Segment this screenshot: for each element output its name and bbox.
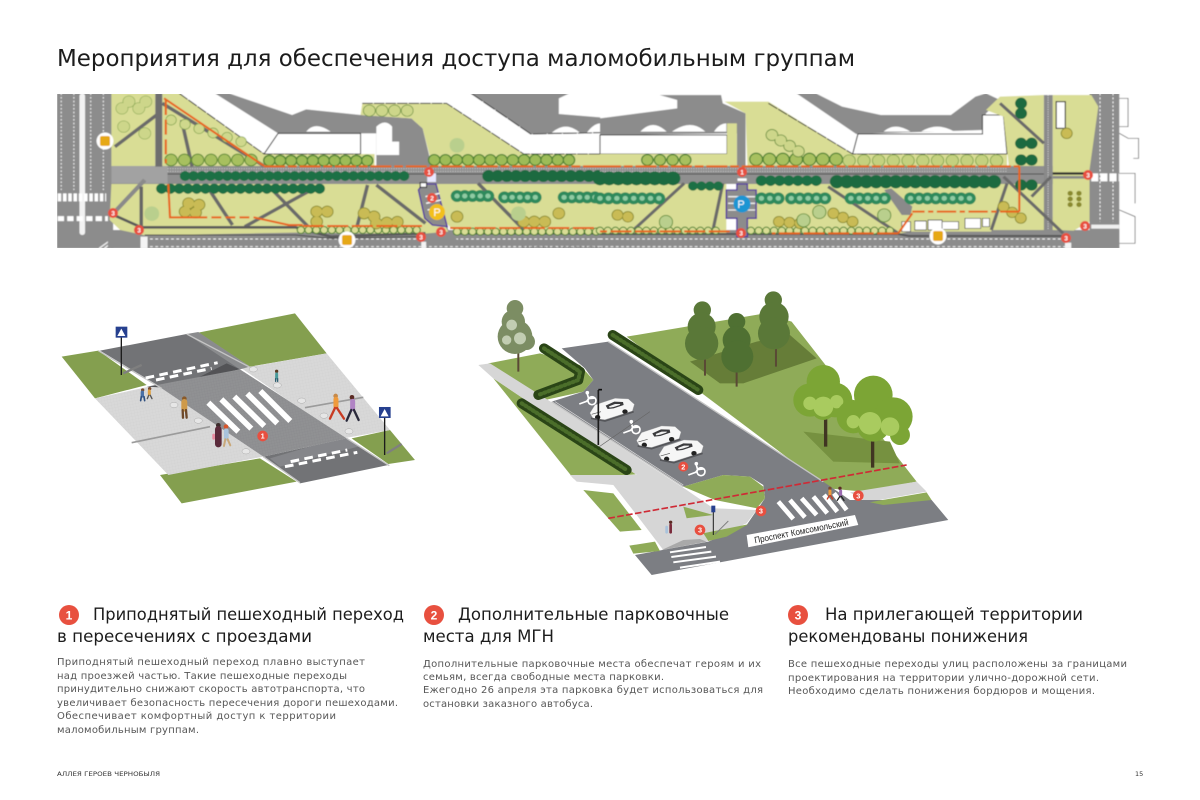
map east half (600, 93, 1139, 248)
road signs (116, 327, 402, 455)
lawns (627, 313, 917, 492)
pedestrians (141, 370, 359, 446)
heading 2: места для МГН (423, 627, 554, 647)
badge 3 (788, 605, 808, 625)
paving (478, 363, 757, 550)
orange route west (164, 98, 600, 228)
accessible bays (579, 392, 596, 405)
alley (111, 166, 600, 184)
red dashed boundary (608, 465, 907, 518)
body 1: Обеспечивает комфортный доступ к территории (57, 711, 336, 722)
heading 1 (57, 605, 404, 647)
body 3 (788, 659, 1127, 697)
markers: 3 (856, 491, 860, 500)
body 3: Все пешеходные переходы улиц расположены за границами (788, 659, 1127, 670)
title: Мероприятия для обеспечения доступа маломобильным группам (57, 46, 855, 72)
column 2: parking text (423, 605, 763, 710)
map markers: numbers: 1 (427, 170, 431, 176)
deciduous trees (793, 365, 913, 468)
trees east (600, 103, 1079, 231)
markers: 3 (759, 507, 763, 516)
map markers: numbers: 3 (1086, 172, 1090, 180)
badge 1: 1 (66, 608, 73, 622)
trees west (122, 102, 600, 232)
parking MGN west (418, 184, 447, 227)
street label: Комсомольский проспект (522, 245, 605, 252)
alley east (600, 166, 1053, 184)
small road sign (711, 506, 728, 535)
hedges (522, 335, 698, 470)
crosswalks (778, 493, 847, 519)
heading 2: Дополнительные парковочные (458, 605, 729, 625)
lawns west (111, 93, 155, 166)
map markers: numbers: 3 (1064, 236, 1068, 242)
map west half (57, 93, 600, 248)
body 1: Приподнятый пешеходный переход плавно выступает (57, 657, 365, 668)
markers: 3 (698, 526, 702, 535)
map markers: numbers (108, 167, 1093, 243)
body 2: Ежегодно 26 апреля эта парковка будет использоваться для (423, 685, 763, 696)
heading 1: Приподнятый пешеходный переход (93, 605, 404, 625)
cars (590, 398, 634, 421)
badge 1 (59, 605, 79, 625)
map markers: numbers: 3 (439, 230, 443, 236)
body 3: Необходимо сделать понижения бордюров и мощения. (788, 686, 1095, 697)
map marker: parking (429, 196, 750, 220)
heading 3: На прилегающей территории (825, 605, 1083, 625)
bollards (170, 367, 353, 454)
map markers: numbers: 3 (1083, 224, 1087, 230)
illustration: parking for disabled (478, 291, 948, 575)
column 1: raised crossing text (57, 605, 404, 736)
map marker: parking: P (737, 199, 745, 211)
body 3: проектирования на территории улично-дорожной сети. (788, 673, 1099, 684)
map markers: numbers: 3 (111, 210, 115, 218)
lawns east (600, 123, 737, 166)
heading 3: рекомендованы понижения (788, 627, 1028, 647)
paths east (630, 103, 1063, 233)
conifer trees (498, 291, 790, 387)
map marker: parking: P (433, 207, 441, 219)
map markers: numbers: 3 (137, 228, 141, 234)
map marker: bus stops (96, 132, 946, 248)
badge 2 (424, 605, 444, 625)
heading 3 (788, 605, 1083, 647)
paths (115, 103, 527, 233)
body 1: над проезжей частью. Такие пешеходные переходы (57, 671, 347, 682)
asphalt (552, 342, 948, 575)
map markers: numbers: 1 (740, 170, 744, 176)
lamp post (598, 390, 650, 447)
illustration: raised pedestrian crossing (62, 313, 415, 503)
heading 2 (423, 605, 729, 647)
page number: 15 (1135, 770, 1143, 778)
pedestrians (667, 487, 844, 532)
markers (678, 462, 864, 535)
body 1: увеличивает безопасность пересечения дороги пешеходами. (57, 698, 398, 709)
map markers: numbers: 3 (739, 230, 743, 238)
crosswalk stripes (208, 391, 290, 432)
body 2: остановки заказного автобуса. (423, 699, 593, 710)
parking blue east (726, 184, 756, 237)
footer label: АЛЛЕЯ ГЕРОЕВ ЧЕРНОБЫЛЯ (57, 770, 160, 778)
orange route east (600, 166, 1019, 233)
street name plate: Проспект Комсомольский (753, 517, 849, 545)
body 1 (57, 657, 398, 736)
body 2: Дополнительные парковочные места обеспечат героям и их (423, 659, 761, 670)
body 1: принудительно снижают скорость автотранспорта, что (57, 684, 365, 695)
marker 1: 1 (261, 432, 265, 441)
building row east (902, 218, 989, 232)
map markers: numbers: 2 (430, 196, 434, 202)
site plan map (57, 93, 1143, 252)
badge 2: 2 (431, 608, 438, 622)
body 1: маломобильным группам. (57, 725, 199, 736)
badge 3: 3 (795, 608, 802, 622)
map markers: numbers: 3 (419, 234, 423, 242)
body 2 (423, 659, 763, 710)
marker 1 (257, 431, 268, 441)
small lawns (683, 475, 765, 508)
column 3: kerb lowering text (788, 605, 1127, 697)
checker markings (146, 363, 218, 380)
body 2: семьям, всегда свободные места парковки. (423, 672, 664, 683)
markers: 2 (681, 462, 685, 471)
heading 1: в пересечениях с проездами (57, 627, 312, 647)
